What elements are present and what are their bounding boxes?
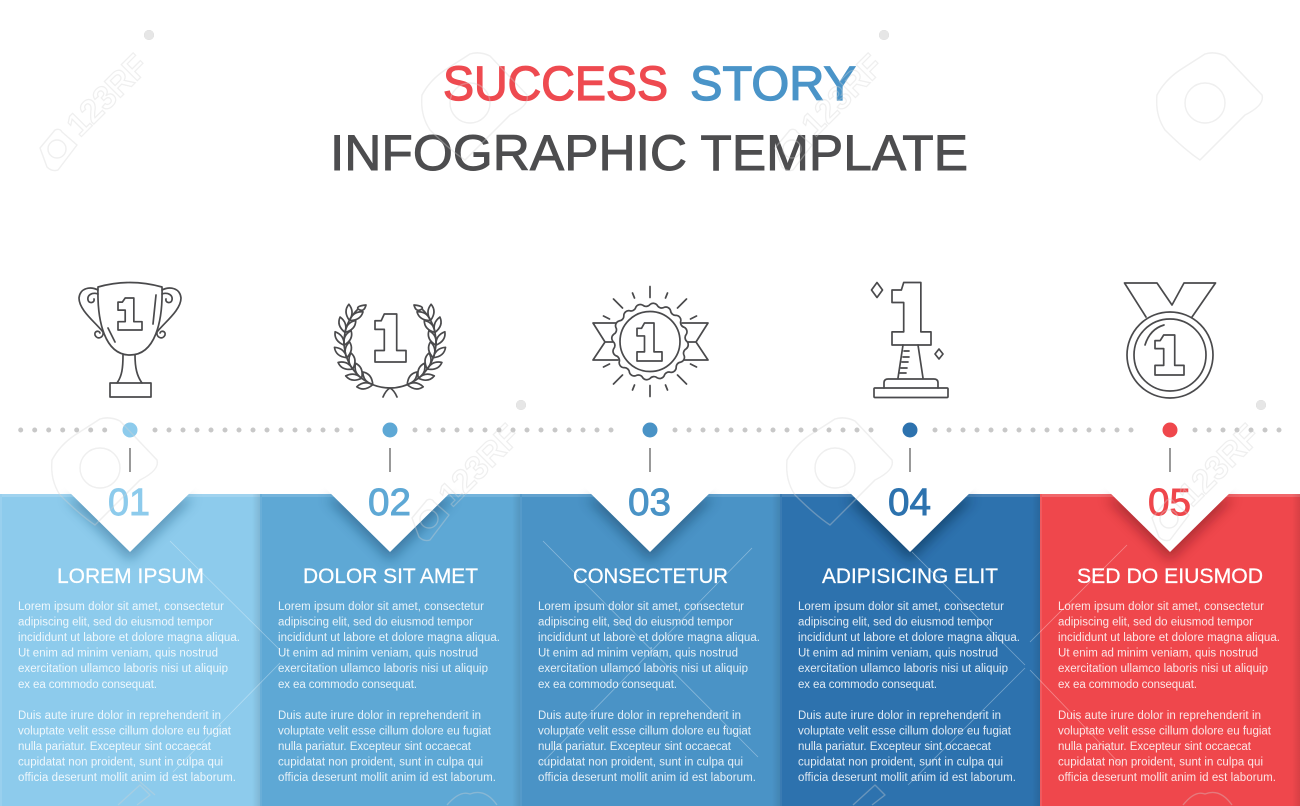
body text 3: exercitation ullamco laboris nisi ut aliquip [538, 663, 748, 675]
body text 4: officia deserunt mollit anim id est laborum. [798, 772, 1016, 784]
body text 4: adipiscing elit, sed do eiusmod tempor [798, 616, 993, 628]
panel 3: consectetur [520, 482, 780, 806]
body text 5: Ut enim ad minim veniam, quis nostrud [1058, 648, 1258, 660]
body text 2: incididunt ut labore et dolore magna aliqua. [278, 632, 500, 644]
body text 3 [538, 601, 760, 784]
body text 3: cupidatat non proident, sunt in culpa qui [538, 756, 743, 768]
body text 4: voluptate velit esse cillum dolore eu fugiat [798, 726, 1012, 738]
number 01: 01 [108, 482, 150, 524]
body text 2: officia deserunt mollit anim id est laborum. [278, 772, 496, 784]
icon: medal [1124, 283, 1216, 398]
body text 5: cupidatat non proident, sunt in culpa qui [1058, 756, 1263, 768]
body text 3: Duis aute irure dolor in reprehenderit in [538, 710, 741, 722]
pointer 4 [840, 483, 980, 552]
body text 4: Lorem ipsum dolor sit amet, consectetur [798, 601, 1004, 613]
pointer 5 [1100, 483, 1240, 552]
body text 5: nulla pariatur. Excepteur sint occaecat [1058, 741, 1252, 753]
body text 2: nulla pariatur. Excepteur sint occaecat [278, 741, 472, 753]
heading 5: SED DO EIUSMOD [1077, 565, 1263, 588]
title line 1: success story [443, 58, 856, 111]
body text 3: officia deserunt mollit anim id est laborum. [538, 772, 756, 784]
body text 1: ex ea commodo consequat. [18, 679, 157, 691]
watermark overlay: 123RF [1171, 417, 1267, 513]
body text 5: voluptate velit esse cillum dolore eu fugiat [1058, 726, 1272, 738]
body text 4: cupidatat non proident, sunt in culpa qui [798, 756, 1003, 768]
body text 2: cupidatat non proident, sunt in culpa qui [278, 756, 483, 768]
body text 3: adipiscing elit, sed do eiusmod tempor [538, 616, 733, 628]
body text 1: exercitation ullamco laboris nisi ut aliquip [18, 663, 228, 675]
body text 3: nulla pariatur. Excepteur sint occaecat [538, 741, 732, 753]
watermark overlay: 123RF [431, 417, 527, 513]
number 05: 05 [1148, 482, 1191, 524]
panel 4: adipisicing elit [780, 482, 1040, 806]
watermark hairlines on panels [170, 541, 1127, 785]
body text 4 [798, 601, 1020, 784]
panel 2: dolor sit amet [260, 482, 520, 806]
body text 4: ex ea commodo consequat. [798, 679, 937, 691]
body text 1: Ut enim ad minim veniam, quis nostrud [18, 648, 218, 660]
pointer 2 [320, 483, 460, 552]
body text 5: officia deserunt mollit anim id est laborum. [1058, 772, 1276, 784]
body text 4: incididunt ut labore et dolore magna aliqua. [798, 632, 1020, 644]
number 02: 02 [368, 482, 411, 524]
body text 1 [18, 601, 240, 784]
body text 2: exercitation ullamco laboris nisi ut aliquip [278, 663, 488, 675]
timeline markers [122, 422, 1178, 438]
icon: laurel wreath [334, 304, 446, 397]
panel 5: sed do eiusmod [1040, 482, 1300, 806]
body text 5: exercitation ullamco laboris nisi ut aliquip [1058, 663, 1268, 675]
body text 5: adipiscing elit, sed do eiusmod tempor [1058, 616, 1253, 628]
panel 1: lorem ipsum [0, 482, 260, 806]
body text 5 [1058, 601, 1280, 784]
body text 4: Duis aute irure dolor in reprehenderit in [798, 710, 1001, 722]
body text 1: nulla pariatur. Excepteur sint occaecat [18, 741, 212, 753]
body text 1: Lorem ipsum dolor sit amet, consectetur [18, 601, 224, 613]
body text 5: ex ea commodo consequat. [1058, 679, 1197, 691]
body text 1: officia deserunt mollit anim id est laborum. [18, 772, 236, 784]
body text 2: Ut enim ad minim veniam, quis nostrud [278, 648, 478, 660]
body text 1: voluptate velit esse cillum dolore eu fugiat [18, 726, 232, 738]
body text 4: nulla pariatur. Excepteur sint occaecat [798, 741, 992, 753]
body text 5: Lorem ipsum dolor sit amet, consectetur [1058, 601, 1264, 613]
body text 2: voluptate velit esse cillum dolore eu fugiat [278, 726, 492, 738]
title line 1: success story: STORY [690, 58, 856, 111]
icon: number one statue [872, 282, 948, 398]
body text 4: Ut enim ad minim veniam, quis nostrud [798, 648, 998, 660]
timeline dotted line [21, 428, 1281, 432]
heading 4: ADIPISICING ELIT [822, 565, 998, 588]
body text 1: incididunt ut labore et dolore magna aliqua. [18, 632, 240, 644]
body text 5: incididunt ut labore et dolore magna aliqua. [1058, 632, 1280, 644]
watermark overlay: 123RF [59, 47, 155, 143]
body text 2: ex ea commodo consequat. [278, 679, 417, 691]
pointer 1 [60, 483, 200, 552]
body text 1: adipiscing elit, sed do eiusmod tempor [18, 616, 213, 628]
pointer 3 [580, 483, 720, 552]
body text 2 [278, 601, 500, 784]
heading 2: DOLOR SIT AMET [303, 565, 478, 588]
body text 3: incididunt ut labore et dolore magna aliqua. [538, 632, 760, 644]
body text 1: cupidatat non proident, sunt in culpa qui [18, 756, 223, 768]
number 03: 03 [628, 482, 671, 524]
body text 2: Duis aute irure dolor in reprehenderit in [278, 710, 481, 722]
heading 1: LOREM IPSUM [57, 565, 204, 588]
body text 2: adipiscing elit, sed do eiusmod tempor [278, 616, 473, 628]
body text 5: Duis aute irure dolor in reprehenderit in [1058, 710, 1261, 722]
body text 3: ex ea commodo consequat. [538, 679, 677, 691]
icon: trophy [79, 282, 181, 397]
heading 3: CONSECTETUR [573, 565, 728, 588]
body text 1: Duis aute irure dolor in reprehenderit in [18, 710, 221, 722]
body text 4: exercitation ullamco laboris nisi ut aliquip [798, 663, 1008, 675]
watermark overlay: 123RF [794, 47, 890, 143]
icon: rosette badge [593, 286, 708, 396]
body text 3: Lorem ipsum dolor sit amet, consectetur [538, 601, 744, 613]
body text 3: Ut enim ad minim veniam, quis nostrud [538, 648, 738, 660]
body text 3: voluptate velit esse cillum dolore eu fugiat [538, 726, 752, 738]
body text 2: Lorem ipsum dolor sit amet, consectetur [278, 601, 484, 613]
title line 2: infographic template: INFOGRAPHIC TEMPLATE [330, 125, 968, 181]
timeline connectors [130, 448, 1170, 472]
number 04: 04 [888, 482, 931, 524]
title [330, 58, 968, 181]
title line 1: success story: SUCCESS [443, 58, 668, 111]
